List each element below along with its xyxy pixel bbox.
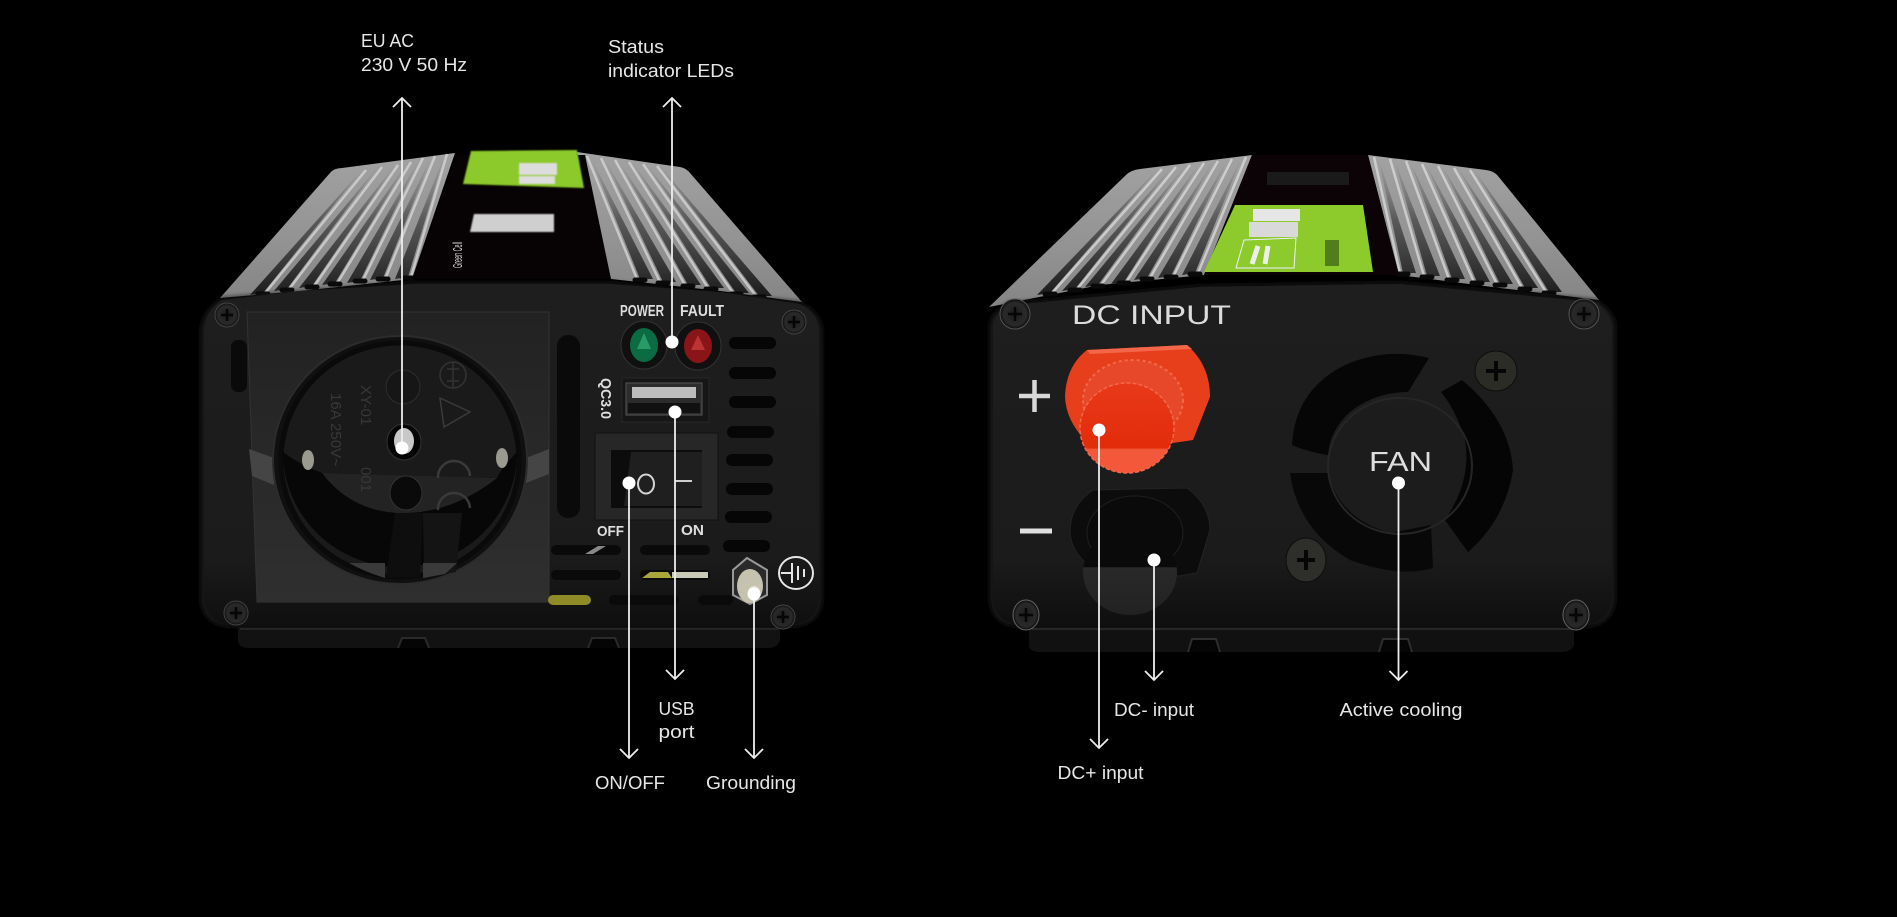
right heat-sink fins [577,152,802,302]
callout: DC+ input [1058,424,1144,783]
front panel [200,282,823,627]
fan screws [1286,351,1517,582]
left heat-sink fins [989,155,1252,307]
top label green area [463,150,584,188]
callout: USB port: port [658,721,694,742]
bottom ventilation slots [548,545,733,605]
minus sign [1020,528,1052,534]
callout: ON/OFF switch: ON/OFF [595,772,665,793]
callout: DC+ input: DC+ input [1058,762,1144,783]
callout: grounding: Grounding [706,772,796,793]
callout: EU AC socket: 230 V 50 Hz [361,54,467,75]
socket plate and Schuko socket: 001 [357,467,374,492]
callout: active cooling: Active cooling [1340,699,1462,720]
side ventilation slots [723,337,776,552]
power and fault LEDs: POWER [620,303,664,320]
top label black band [1204,155,1399,275]
right heat-sink fins [1368,155,1599,300]
ON/OFF rocker switch: ON [681,522,704,539]
callout: DC- input: DC- input [1114,699,1194,720]
vertical slot next to socket [557,335,580,518]
callout: EU AC socket: EU AC [361,30,414,51]
left heat-sink fins [220,153,455,298]
callout: DC- input [1114,554,1194,720]
QC3.0 USB port [597,378,709,422]
power and fault LEDs [620,303,724,370]
bottom lip [1029,627,1574,652]
left slot [231,340,247,392]
product: rear view of inverter [989,155,1616,652]
power and fault LEDs: FAULT [680,303,724,320]
callout: grounding [706,588,796,793]
callout: ON/OFF switch [595,476,665,793]
callout: active cooling [1340,476,1462,720]
socket plate and Schuko socket: 16A 250V~ [327,393,344,467]
callout: status LEDs [608,36,734,348]
grounding symbol [779,557,813,589]
socket plate and Schuko socket [247,312,549,602]
grounding bolt [733,558,767,604]
callout: status LEDs: Status [608,36,664,57]
bottom lip [238,627,780,648]
screws [215,303,806,629]
top label black band [412,155,611,279]
top label white window [470,214,554,232]
DC INPUT heading: DC INPUT [1072,300,1231,330]
socket plate and Schuko socket: XY-01 [357,385,374,425]
QC3.0 USB port: QC3.0 [597,378,614,419]
screws [1000,299,1599,630]
ON/OFF rocker switch: OFF [597,523,624,540]
product: front view of inverter: Green Cell [450,242,465,268]
ON/OFF rocker switch [595,433,718,540]
callout: USB port: USB [658,698,694,719]
red DC+ terminal [1065,345,1210,473]
black DC- terminal [1070,488,1210,615]
callout: EU AC socket [361,30,467,454]
top label green area [1204,205,1373,272]
callout: USB port [658,406,694,742]
FAN label: FAN [1369,446,1432,477]
product: front view of inverter [200,150,823,648]
rear panel [989,282,1616,627]
cooling fan grille [1290,354,1513,572]
callout: status LEDs: indicator LEDs [608,60,734,81]
plus sign [1019,380,1050,412]
